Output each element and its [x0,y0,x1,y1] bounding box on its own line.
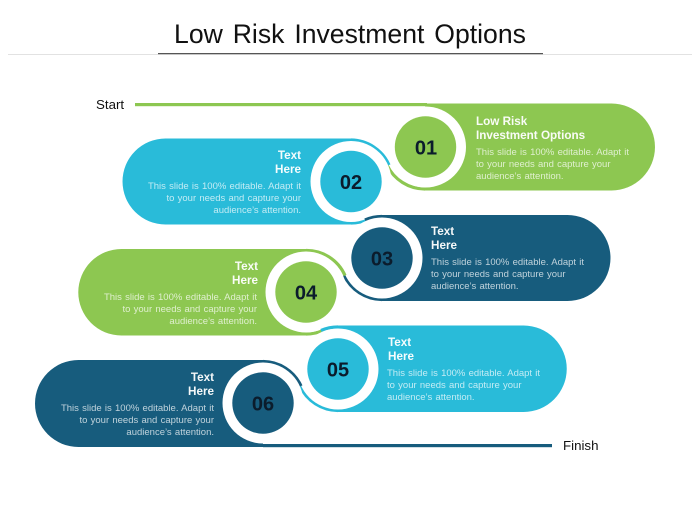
panel: step 06: Text [191,371,214,384]
panel: step 06: to your needs and capture your [79,415,214,426]
panel: step 05: This slide is 100% editable. Adapt it [387,368,540,379]
panel: step 05: Text [388,336,411,349]
panel: step 01: audience’s attention. [476,171,564,182]
finish label: Finish [563,438,598,453]
panel: step 01 [385,104,655,190]
panel: step 04: Here [232,274,258,287]
panel: step 05: Here [388,350,414,363]
panel: step 03: Here [431,239,457,252]
panel: step 03: audience’s attention. [431,281,519,292]
panel: step 03: 03 [371,248,393,270]
panel: step 03: This slide is 100% editable. Adapt it [431,257,584,268]
panel: step 05: to your needs and capture your [387,380,522,391]
panel: step 06 [35,360,304,447]
panel: step 03 [342,215,610,301]
panel: step 05: audience’s attention. [387,392,475,403]
panel: step 03: to your needs and capture your [431,269,566,280]
panel: step 01: 01 [415,138,437,160]
panel: step 05 [298,326,567,412]
start line [135,103,427,106]
panel: step 02: Text [278,149,301,162]
panel: step 04: This slide is 100% editable. Adapt it [104,292,257,303]
panel: step 06: This slide is 100% editable. Adapt it [61,403,214,414]
start label: Start [96,97,124,112]
panel: step 02: This slide is 100% editable. Adapt it [148,181,301,192]
panel: step 04: to your needs and capture your [122,304,257,315]
panel: step 02: Here [275,163,301,176]
panel: step 02: audience’s attention. [213,205,301,216]
title: Low Risk Investment Options [174,19,526,49]
panel: step 06: 06 [252,394,274,416]
panel: step 02 [123,138,392,224]
finish line [263,444,552,447]
panel: step 04 [78,249,347,336]
panel: step 06: audience’s attention. [126,427,214,438]
panel: step 01: Low Risk [476,115,528,128]
panel: step 04: Text [235,260,258,273]
panel: step 01: to your needs and capture your [476,159,611,170]
panel: step 04: audience’s attention. [169,316,257,327]
panel: step 05: 05 [327,360,349,382]
panel: step 06: Here [188,385,214,398]
panel: step 03: Text [431,225,454,238]
panel: step 02: to your needs and capture your [166,193,301,204]
panel: step 01: Investment Options [476,129,586,142]
panel: step 01: This slide is 100% editable. Adapt it [476,147,629,158]
panel: step 02: 02 [340,172,362,194]
panel: step 04: 04 [295,282,318,304]
